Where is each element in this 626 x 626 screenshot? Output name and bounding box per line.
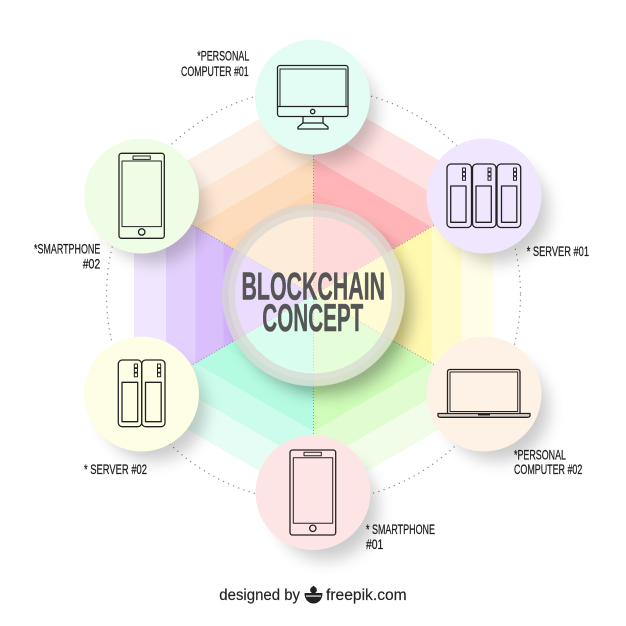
sector: yellow <box>314 191 493 399</box>
sector: green <box>314 295 493 502</box>
label: smartphone 02 <box>34 240 100 271</box>
label: smartphone 01: #01 <box>366 536 383 552</box>
label: server 01: * SERVER #01 <box>527 243 589 259</box>
icon: desktop monitor <box>278 66 348 129</box>
sector: orange <box>134 88 314 295</box>
icon: three servers <box>447 164 521 228</box>
label: server 02: * SERVER #02 <box>84 461 147 477</box>
node: smartphone 02 <box>84 138 206 263</box>
label: smartphone 02: *SMARTPHONE <box>34 240 100 256</box>
node: server 02 <box>84 336 206 461</box>
label: smartphone 01: * SMARTPHONE <box>366 521 435 537</box>
icon: laptop <box>438 370 530 417</box>
icon: smartphone <box>290 450 336 535</box>
footer credit: freepik.com <box>326 587 407 604</box>
dotted outer ring <box>106 88 520 502</box>
node: smartphone 01 <box>256 435 378 560</box>
footer credit <box>219 586 407 604</box>
sector: red <box>314 88 493 295</box>
label: personal computer 01: COMPUTER #01 <box>181 63 249 79</box>
node: personal computer 02 <box>426 336 549 461</box>
hexagon diagram <box>134 88 493 502</box>
icon: freepik logo <box>304 586 322 604</box>
label: personal computer 01: *PERSONAL <box>197 48 249 64</box>
title: BLOCKCHAIN <box>242 266 385 308</box>
label: smartphone 02: #02 <box>83 255 100 271</box>
dotted spokes <box>184 145 444 445</box>
title: CONCEPT <box>262 297 364 340</box>
sector: teal <box>134 295 314 502</box>
label: smartphone 01 <box>366 521 435 552</box>
icon: two servers <box>118 360 165 427</box>
sector: purple <box>134 191 314 399</box>
icon: smartphone <box>119 153 164 238</box>
node: server 01 <box>426 138 549 263</box>
footer credit: designed by <box>219 587 300 604</box>
center glass disc <box>228 210 398 380</box>
label: personal computer 01 <box>181 48 249 79</box>
center shadow <box>236 219 412 395</box>
label: personal computer 02: *PERSONAL <box>514 446 566 462</box>
label: personal computer 02: COMPUTER #02 <box>514 461 582 477</box>
title <box>242 266 385 340</box>
node: personal computer 01 <box>255 40 377 164</box>
label: personal computer 02 <box>514 446 582 477</box>
